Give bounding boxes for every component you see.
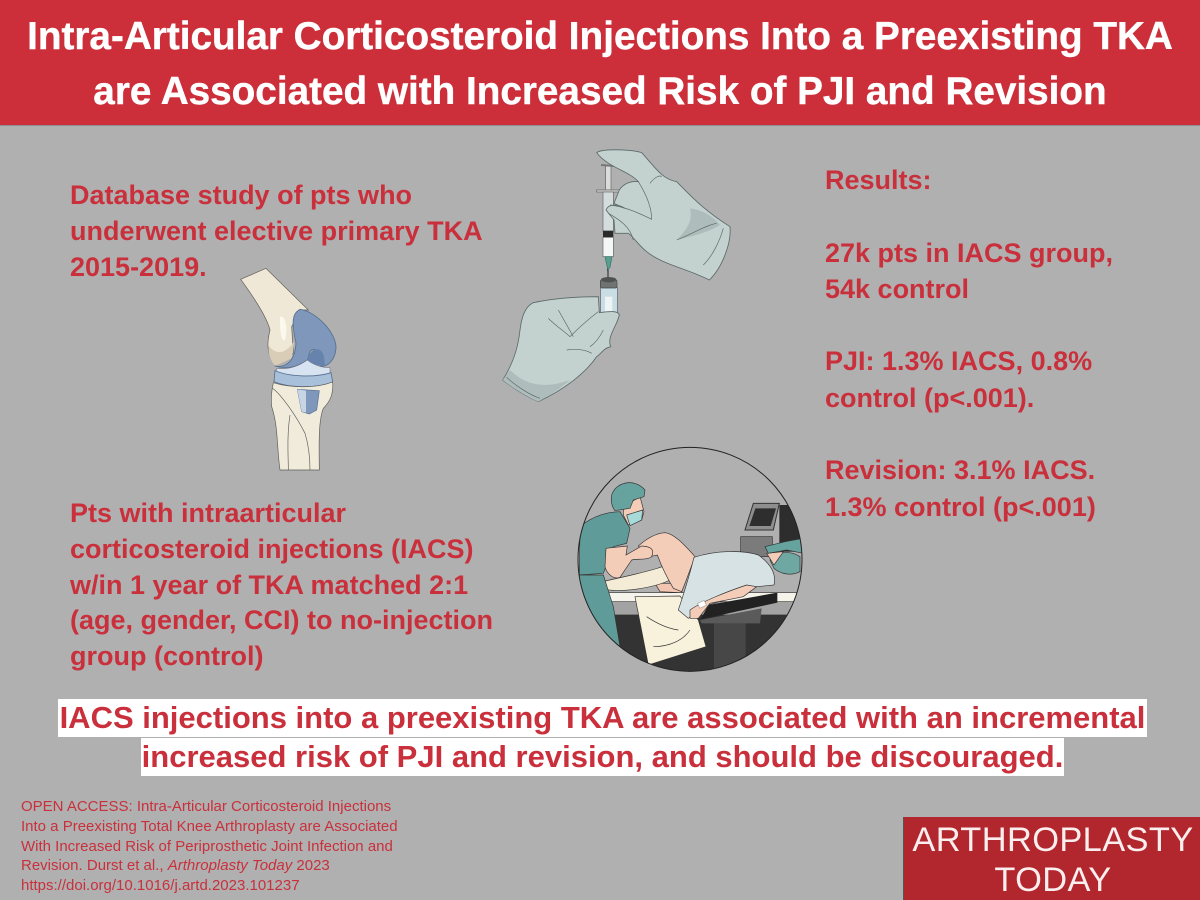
text block: matching methods: group (control) [70, 641, 263, 671]
surgeon arm [605, 546, 653, 578]
conclusion line 2: increased risk of PJI and revision, and should be discouraged. [142, 739, 1063, 774]
syringe [597, 165, 619, 280]
journal logo [903, 817, 1200, 900]
patient arm [690, 585, 757, 618]
monitor [745, 503, 779, 530]
text block: results: 54k control [825, 274, 969, 304]
gown [678, 552, 775, 618]
icon: circular injection scene [578, 446, 802, 672]
table arm rest [701, 593, 777, 619]
text block: study design: Database study of pts who [70, 180, 412, 210]
citation: Revision. Durst et al., Arthroplasty Today 2023 [21, 857, 330, 874]
table base [615, 615, 786, 671]
text block: matching methods: corticosteroid injections (IACS) [70, 534, 474, 564]
icon: gloved hands with syringe and vial [502, 149, 731, 402]
surgeon body [579, 512, 630, 575]
title line 2: are Associated with Increased Risk of PJI and Revision [93, 70, 1107, 113]
text block: matching methods [70, 498, 493, 671]
citation: OPEN ACCESS: Intra-Articular Corticosteroid Injections [21, 798, 391, 815]
citation: https://doi.org/10.1016/j.artd.2023.101237 [21, 877, 300, 894]
text block: matching methods: w/in 1 year of TKA matched 2:1 [70, 570, 468, 600]
text block: study design [70, 180, 483, 282]
text block: matching methods: Pts with intraarticular [70, 498, 346, 528]
pillow and skin under knee [655, 583, 683, 593]
citation: Into a Preexisting Total Knee Arthroplasty are Associated [21, 818, 398, 835]
logo text line 2: TODAY [994, 861, 1112, 899]
lower glove [503, 297, 619, 402]
logo text line 1: ARTHROPLASTY [912, 821, 1194, 859]
text block: matching methods: (age, gender, CCI) to no-injection [70, 605, 493, 635]
citation: With Increased Risk of Periprosthetic Joint Infection and [21, 838, 393, 855]
conclusion line 1: IACS injections into a preexisting TKA are associated with an incremental [60, 700, 1145, 735]
icon: knee implant [240, 268, 336, 470]
pillow under knee [603, 566, 670, 590]
text block: results: Revision: 3.1% IACS. [825, 455, 1095, 485]
text block: study design: 2015-2019. [70, 252, 207, 282]
text block: results: 27k pts in IACS group, [825, 238, 1113, 268]
conclusion callout [58, 699, 1147, 776]
header banner [0, 0, 1200, 126]
patient leg [638, 533, 695, 592]
text block: results: 1.3% control (p<.001) [825, 492, 1096, 522]
title line 1: Intra-Articular Corticosteroid Injections Into a Preexisting TKA [27, 15, 1173, 58]
citation [21, 798, 398, 894]
patient head [770, 553, 800, 574]
drape [635, 596, 706, 665]
text block: results: PJI: 1.3% IACS, 0.8% [825, 346, 1092, 376]
vial [600, 277, 617, 313]
text block: results [825, 165, 1113, 522]
text block: results: Results: [825, 165, 932, 195]
text block: study design: underwent elective primary TKA [70, 216, 483, 246]
text block: results: control (p<.001). [825, 383, 1034, 413]
upper glove [597, 150, 730, 280]
surgeon head [623, 497, 644, 525]
